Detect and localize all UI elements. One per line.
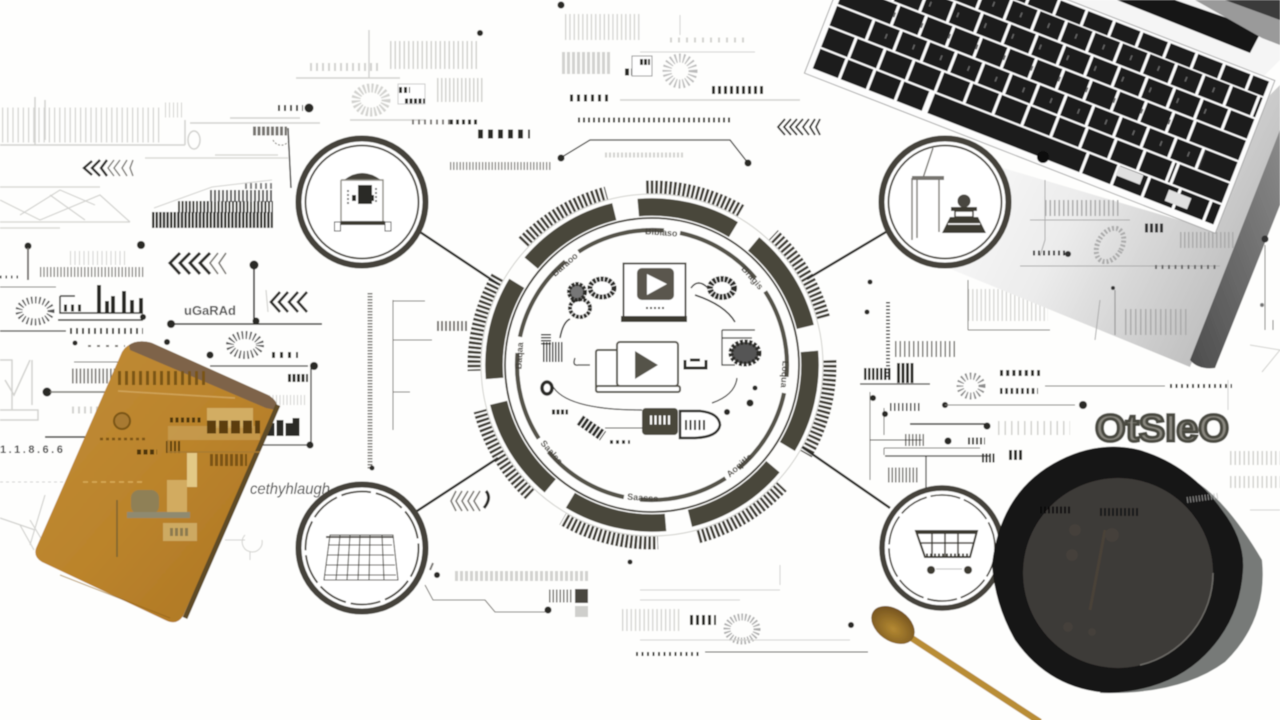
panel: middle-left connector: [167, 260, 322, 328]
icon: circle top-left: [298, 138, 426, 266]
laptop grey lid: [1195, 0, 1280, 45]
chart: thin outer circle: [481, 194, 823, 536]
icon: faded chevrons: [108, 160, 133, 176]
panel: left wave chart: [0, 241, 145, 287]
panel: bottom-centre charts: [455, 560, 868, 654]
icon: circle top-right: [882, 138, 1008, 266]
icon: gold spoon: [864, 598, 1040, 720]
panel: chevrons lower left of ring: [451, 491, 489, 511]
text: ring labels: Baraoo: [550, 250, 580, 279]
panel: top-centre charts: [296, 2, 564, 166]
panel: orbiting doodles: [542, 279, 759, 442]
text: ring labels: Aoqitle: [724, 452, 754, 479]
icon: connector bottom-left: [417, 458, 498, 511]
panel: right side of ring charts: [860, 280, 1232, 396]
icon: top-left chevrons on row: [170, 253, 210, 274]
keyboard: [804, 0, 1275, 233]
white hatched key 2: [1165, 190, 1191, 209]
panel: bottom-left trace: [407, 552, 588, 617]
text: numbers left: 1.1.8.6.6: [0, 444, 65, 456]
panel: central vertical lines: [370, 293, 468, 470]
laptop side band: [1190, 130, 1280, 368]
pan shadow: [1100, 470, 1263, 693]
panel: laptop: [804, 0, 1280, 368]
panel: cloud and dots right of notebook: [206, 335, 318, 448]
chart: inner rings: [505, 218, 799, 512]
panel: left barcode: [42, 362, 118, 437]
panel: right circuit rows: [870, 391, 1087, 532]
bar chart: left dark: [58, 285, 146, 320]
laptop hinge: [1117, 0, 1262, 53]
icon: circle bottom-left: [298, 484, 426, 612]
panel: left dotted row: [0, 331, 170, 346]
chart: central ring: [474, 187, 830, 543]
text: ring labels: Saasss: [627, 492, 659, 504]
text: ring labels: [513, 226, 791, 504]
laptop body top: [807, 0, 1280, 232]
panel: faint line chart: [0, 360, 100, 420]
laptop palm rest: [890, 85, 1280, 367]
legends on keys: [885, 0, 1227, 160]
pan highlight: [1140, 573, 1213, 665]
chart: inner dashed arcs: [492, 205, 812, 525]
icon: chevrons: [84, 160, 107, 176]
icon: dotted cloud: [19, 300, 51, 322]
panel: top-left faint charts: [0, 97, 320, 228]
icon: circle bottom-right: [882, 488, 1002, 608]
icon: faded chevrons on row: [210, 253, 226, 274]
key rows: [817, 0, 1266, 215]
chart: thick segments: [481, 194, 823, 536]
keyboard dot: [1037, 151, 1049, 163]
pan residue: [1040, 496, 1218, 636]
text: ring labels: Loqua: [779, 360, 791, 389]
text: handwritten label: cethyhlaugh: [250, 481, 330, 498]
text: ring labels: Bragis: [739, 264, 765, 292]
icon: connector top-left: [420, 232, 498, 284]
panel: chart right of laptop: [1250, 236, 1280, 372]
laptop faint charts: [1020, 180, 1235, 340]
chart: tick ring: [474, 187, 830, 543]
panel: faint right lines: [1228, 380, 1280, 510]
text: scrawled label: uGaRAd: [184, 303, 236, 318]
icon: laptop with play button: [621, 264, 687, 322]
icon: connector bottom-right: [802, 447, 890, 508]
panel: faint lower-left lines: [0, 482, 262, 560]
text: ring labels: Baqaa: [513, 341, 525, 370]
pan rim: [992, 447, 1243, 693]
text: ring labels: Saalss: [538, 438, 565, 466]
text: ring labels: Biblaso: [645, 226, 678, 238]
icon: connector top-right: [807, 232, 886, 279]
text: logo: OtSIeO: [1095, 408, 1229, 450]
bar chart: dense: [152, 180, 273, 220]
icon: cast-iron pan: [992, 447, 1263, 693]
panel: small bar chart with dots: [253, 104, 314, 188]
icon: notebook: [35, 341, 278, 622]
laptop dark lid: [1225, 0, 1280, 20]
panel: top-middle bar charts: [558, 15, 800, 166]
white hatched key: [1116, 166, 1143, 185]
icon: devices with play button: [596, 342, 680, 392]
pan base: [1023, 478, 1213, 668]
icon: chevrons top right: [778, 119, 820, 135]
